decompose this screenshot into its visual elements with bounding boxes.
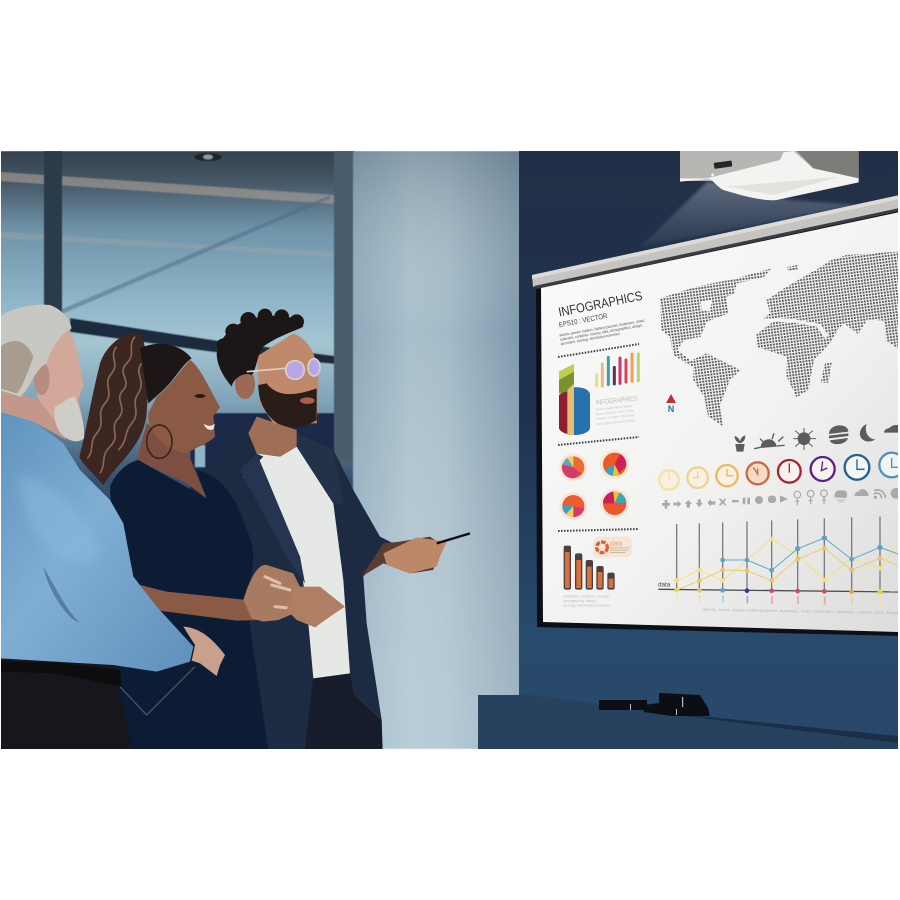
chart caption: atomic, fossil, station, battery,banner, business, chart, collection, container, country, data, design	[703, 608, 899, 615]
dotted divider one	[558, 344, 639, 357]
3D cylinder chart	[559, 364, 590, 435]
neck	[0, 387, 67, 440]
heading: INFOGRAPHICS	[557, 288, 644, 320]
screen housing bar	[532, 195, 900, 289]
light blue wall	[353, 151, 521, 749]
battery bar chart	[564, 546, 615, 590]
small infographic caption: collection, container, data, design	[596, 413, 635, 421]
ear	[235, 369, 255, 399]
small infographic caption: banner, business, chart, country	[596, 408, 634, 416]
pie charts	[559, 450, 629, 520]
braid highlights	[87, 337, 142, 473]
ultra short throw projector	[680, 151, 859, 200]
white beard	[54, 397, 84, 441]
weather icons	[735, 424, 900, 452]
jacket	[203, 427, 393, 750]
navy dress	[100, 460, 268, 750]
t-shirt	[243, 447, 350, 678]
chart axis	[658, 589, 900, 592]
small infographic caption: INFOGRAPHICS	[595, 394, 638, 407]
man's left hand	[287, 587, 345, 627]
description text: document, ecology, electricity,economics	[560, 332, 620, 346]
north compass icon: N	[668, 404, 674, 414]
north compass icon	[666, 394, 676, 414]
forearm	[362, 537, 440, 577]
data badge: data	[610, 540, 623, 547]
battery caption text: collection, container, country,	[563, 595, 609, 599]
face	[37, 327, 83, 423]
Africa	[757, 322, 838, 397]
clasped hands	[243, 565, 302, 622]
sub-heading: EPS10 : VECTOR	[558, 311, 608, 329]
trousers	[305, 673, 383, 750]
beard	[258, 383, 317, 427]
belt	[0, 662, 122, 687]
background: office glass wall	[1, 151, 356, 664]
shirt sleeve highlight	[20, 477, 100, 565]
man with glasses	[203, 309, 470, 750]
neck	[248, 417, 297, 457]
small UI icons row	[662, 488, 900, 509]
description text: atomic power station, battery,banner, business, chart,	[559, 319, 646, 338]
face	[148, 360, 220, 453]
projection screen	[541, 212, 900, 632]
pen pointer	[437, 533, 470, 543]
glasses in hand	[120, 667, 195, 715]
description text: collection, container, country, data, demographics, design,	[560, 323, 643, 342]
clock icons row	[659, 453, 900, 490]
hoop earring	[147, 425, 172, 458]
face	[257, 333, 318, 423]
battery caption text	[563, 595, 610, 608]
small infographic caption: atomic power station, battery	[596, 404, 633, 412]
pointing hand	[383, 537, 447, 573]
line chart	[658, 517, 900, 615]
data badge	[593, 537, 632, 557]
battery caption text: ecology, electricity,economics	[563, 604, 610, 608]
North and South America	[660, 268, 772, 426]
older man's hand	[183, 627, 225, 676]
eye	[195, 394, 205, 398]
trousers	[0, 658, 133, 750]
glasses	[247, 359, 320, 379]
chart axis label: data	[658, 581, 671, 588]
shelf ledge	[478, 695, 898, 749]
forearm	[133, 583, 260, 621]
small infographic caption: demographics, document, ecology	[596, 418, 635, 426]
dotted divider three	[558, 529, 639, 531]
Greenland islands	[787, 265, 798, 271]
projection screen shadow frame	[536, 208, 900, 636]
small infographic caption	[596, 396, 638, 426]
head hair	[140, 344, 192, 403]
fingers	[265, 577, 292, 608]
Madagascar	[821, 363, 832, 383]
projection light beam	[640, 181, 860, 247]
dotted divider two	[558, 437, 639, 445]
shirt fold	[43, 567, 80, 623]
dark navy wall	[519, 151, 900, 749]
people group	[0, 305, 470, 750]
curly hair	[217, 309, 304, 387]
photo scene	[1, 151, 898, 749]
grey hair	[0, 305, 72, 397]
panel: infographic header	[558, 291, 645, 346]
description text	[559, 319, 647, 346]
jacket lapel	[240, 453, 305, 583]
neck	[137, 423, 207, 498]
bar chart	[597, 354, 638, 386]
black devices on shelf	[599, 693, 710, 716]
older man	[0, 305, 225, 750]
blue shirt	[0, 412, 193, 672]
battery caption text: demographics, design,	[563, 599, 597, 603]
ear	[34, 362, 50, 395]
Europe and Asia	[763, 252, 900, 350]
window frame pillars	[44, 151, 354, 461]
smile	[203, 423, 215, 430]
braided hair	[79, 333, 148, 485]
world dot map	[660, 252, 900, 426]
woman	[79, 333, 302, 750]
